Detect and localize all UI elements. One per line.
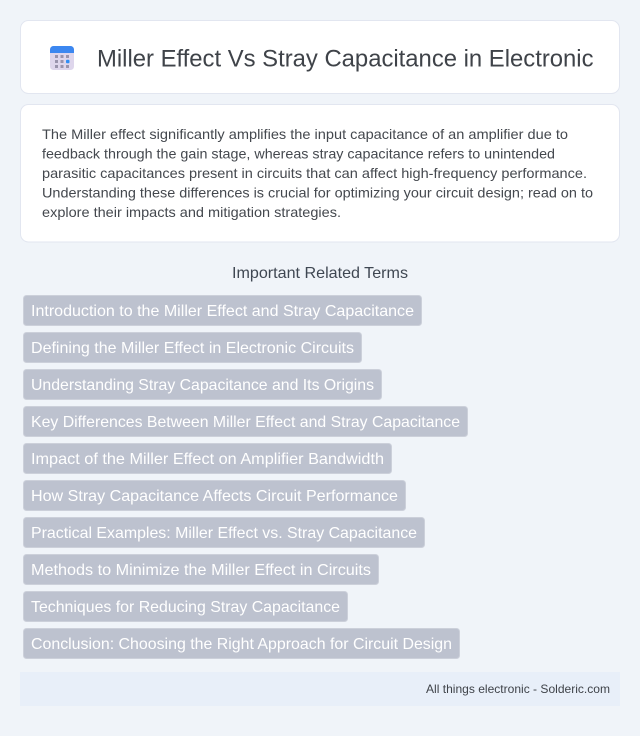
- term chip 2: [24, 332, 362, 362]
- term chip 10: [24, 628, 460, 658]
- term chip 4: Key Differences Between Miller Effect and Stray Capacitance: [31, 414, 460, 431]
- term chip 6: [24, 480, 406, 510]
- text block: introduction paragraph: [42, 126, 593, 220]
- term chip 3: [24, 370, 382, 400]
- panel: introduction: [20, 104, 620, 242]
- title: Miller Effect Vs Stray Capacitance in Electronic: [97, 46, 594, 72]
- text block: introduction paragraph: feedback through the gain stage, whereas stray capacitance refers to unintended: [42, 146, 555, 162]
- footer: [20, 672, 620, 706]
- term chip 5: Impact of the Miller Effect on Amplifier Bandwidth: [31, 451, 384, 468]
- term chip 7: [24, 518, 424, 548]
- term chip 1: [24, 296, 422, 326]
- term chip 7: Practical Examples: Miller Effect vs. Stray Capacitance: [31, 525, 417, 542]
- term chip 5: [24, 444, 392, 474]
- heading: important related terms: Important Related Terms: [232, 265, 408, 282]
- panel: related terms list: [24, 296, 468, 658]
- term chip 10: Conclusion: Choosing the Right Approach for Circuit Design: [31, 636, 452, 653]
- term chip 4: [24, 406, 468, 436]
- icon: calendar: [50, 46, 74, 70]
- term chip 3: Understanding Stray Capacitance and Its Origins: [31, 377, 374, 394]
- term chip 2: Defining the Miller Effect in Electronic Circuits: [31, 340, 354, 357]
- footer credit: All things electronic - Solderic.com: [426, 682, 610, 696]
- text block: introduction paragraph: explore their impacts and mitigation strategies.: [42, 204, 341, 220]
- term chip 9: Techniques for Reducing Stray Capacitance: [31, 599, 340, 616]
- term chip 1: Introduction to the Miller Effect and Stray Capacitance: [31, 303, 414, 320]
- term chip 9: [24, 592, 348, 622]
- text block: introduction paragraph: parasitic capacitances present in circuits that can affect high-frequency performance.: [42, 165, 587, 181]
- text block: introduction paragraph: The Miller effect significantly amplifies the input capacitance of an amplifier due to: [42, 126, 568, 142]
- text block: introduction paragraph: Understanding these differences is crucial for optimizing your circuit design; read on to: [42, 184, 593, 200]
- panel: title header: [20, 20, 620, 94]
- term chip 8: [24, 554, 378, 584]
- term chip 8: Methods to Minimize the Miller Effect in Circuits: [31, 562, 371, 579]
- term chip 6: How Stray Capacitance Affects Circuit Performance: [31, 488, 398, 505]
